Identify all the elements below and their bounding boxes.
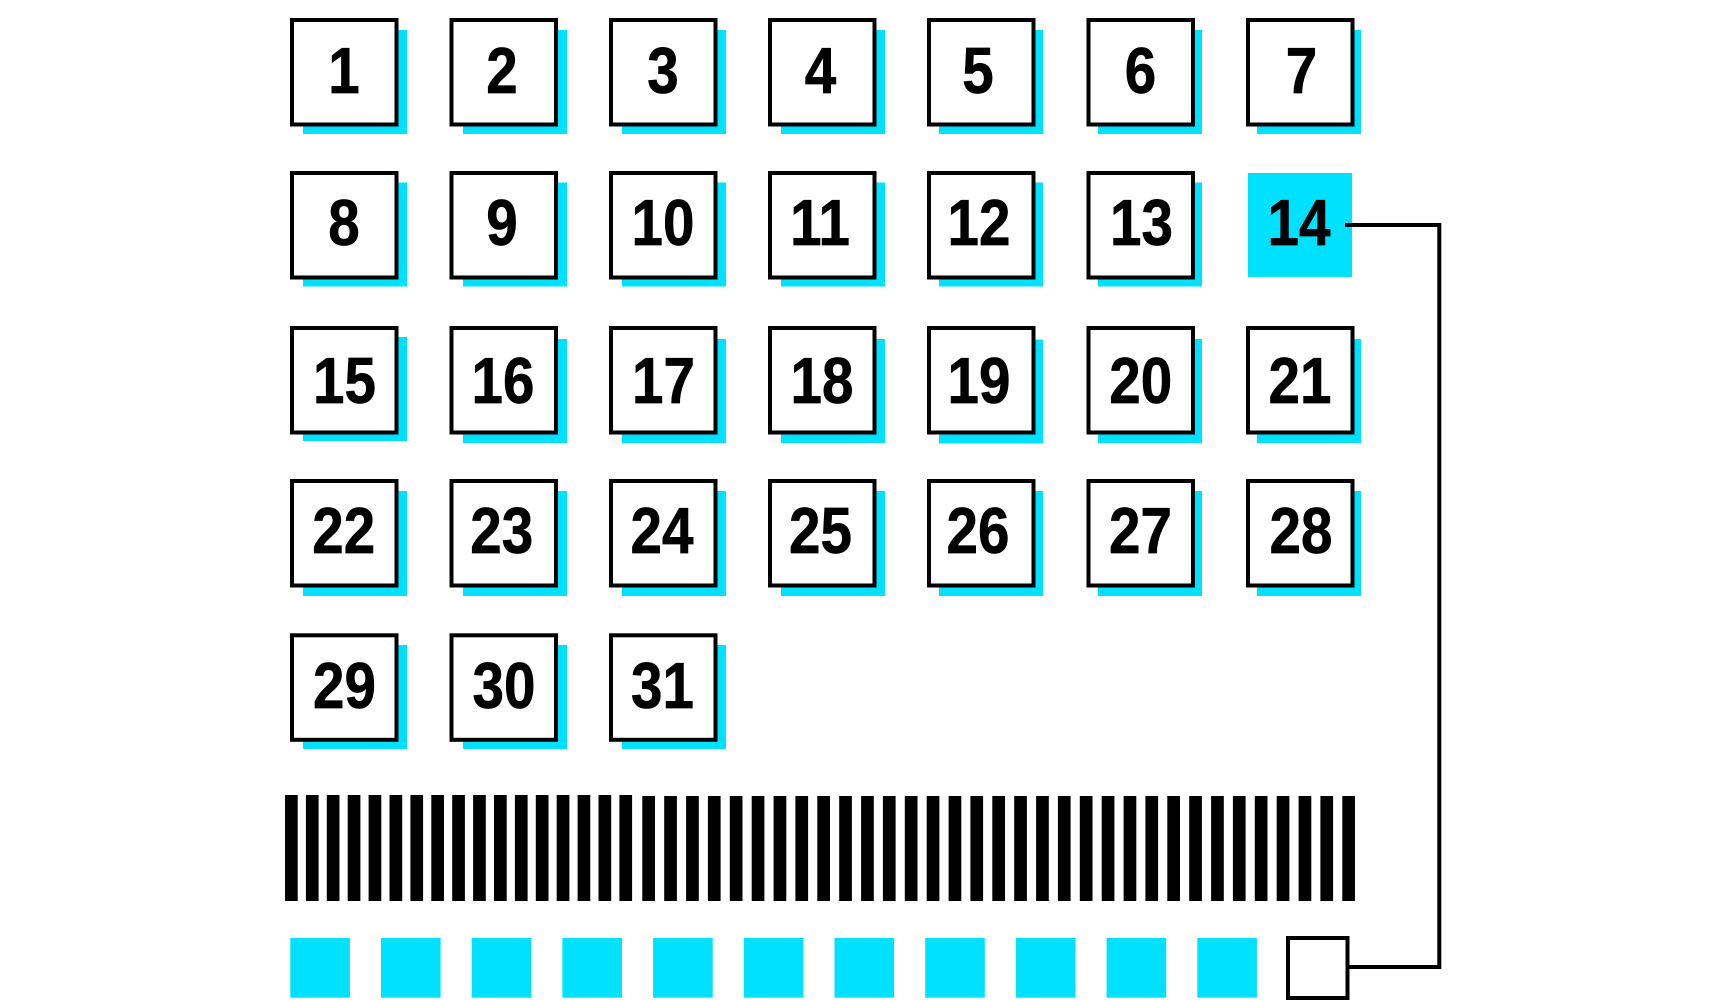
day 30: 30: [473, 649, 535, 722]
day 25: [770, 481, 885, 596]
day 8: 8: [328, 186, 360, 259]
day 19: 19: [948, 344, 1010, 417]
day 7: [1248, 20, 1361, 134]
day 16: 16: [472, 344, 534, 417]
day 2: 2: [486, 34, 518, 107]
calendar grid: [292, 20, 1361, 749]
day 6: [1088, 20, 1202, 134]
day 11: [770, 173, 885, 286]
day 3: 3: [647, 34, 679, 107]
day 18: 18: [791, 344, 853, 417]
day 30: [452, 635, 567, 749]
day 17: 17: [632, 344, 695, 417]
day 23: 23: [470, 494, 533, 567]
day 3: [611, 20, 726, 134]
day 11: 11: [790, 186, 850, 259]
day 4: [770, 20, 885, 134]
day 29: [292, 635, 407, 749]
blue squares row: [290, 938, 1257, 998]
day 10: [611, 173, 726, 286]
day 13: [1088, 173, 1202, 286]
day 31: 31: [631, 649, 694, 722]
day 19: [929, 328, 1043, 444]
day 28: 28: [1270, 494, 1332, 567]
day 2: [452, 20, 567, 134]
tally bars: [285, 795, 1355, 901]
day 24: 24: [631, 494, 694, 567]
day 27: 27: [1109, 494, 1172, 567]
day 5: [929, 20, 1043, 134]
day 23: [452, 481, 567, 596]
day 24: [611, 481, 726, 596]
day 9: 9: [486, 186, 518, 259]
day 8: [292, 173, 407, 286]
day 28: [1248, 481, 1361, 596]
day 7: 7: [1286, 34, 1317, 107]
day 1: 1: [328, 34, 360, 107]
day 14 highlighted: [1248, 173, 1352, 277]
day 26: [929, 481, 1043, 596]
day 14 highlighted: 14: [1268, 186, 1331, 259]
day 18: [770, 328, 885, 443]
day 20: 20: [1109, 344, 1172, 417]
day 22: [292, 481, 407, 596]
day 20: [1088, 328, 1202, 443]
day 21: 21: [1269, 344, 1331, 417]
day 1: [292, 20, 407, 134]
day 27: [1088, 481, 1202, 596]
day 31: [611, 635, 726, 749]
empty square: [1288, 938, 1348, 998]
connector line from day 14 to empty square: [1345, 225, 1439, 967]
day 6: 6: [1125, 34, 1156, 107]
day 12: 12: [948, 186, 1010, 259]
day 13: 13: [1110, 186, 1173, 259]
day 21: [1248, 328, 1361, 443]
day 29: 29: [313, 649, 376, 722]
day 25: 25: [789, 494, 852, 567]
day 4: 4: [805, 34, 836, 107]
day 26: 26: [947, 494, 1009, 567]
day 12: [929, 173, 1043, 286]
day 17: [611, 328, 726, 443]
day 5: 5: [962, 34, 994, 107]
day 9: [452, 173, 567, 286]
day 16: [452, 328, 567, 443]
day 22: 22: [312, 494, 375, 567]
day 15: 15: [313, 344, 376, 417]
day 10: 10: [632, 186, 694, 259]
day 15: [292, 328, 407, 441]
